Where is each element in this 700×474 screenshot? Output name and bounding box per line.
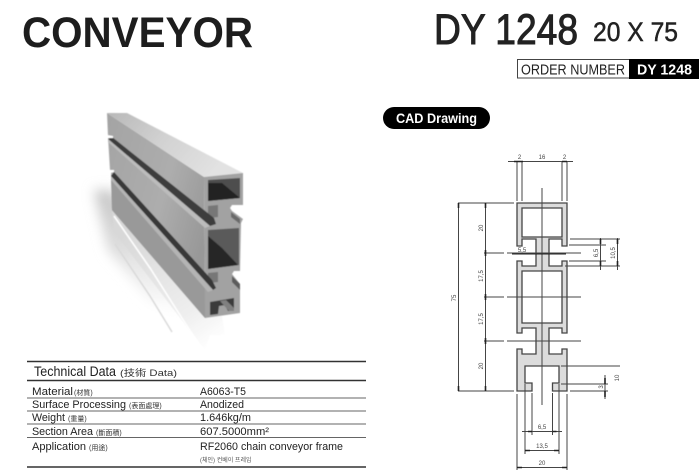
row: section area: (斷面積)	[96, 428, 122, 437]
row: material: (材質)	[74, 388, 93, 397]
model number: DY 1248	[434, 6, 578, 54]
table rules	[27, 362, 366, 467]
dimension labels: 20	[539, 461, 546, 467]
dimension labels: 17,5	[479, 313, 485, 325]
row: material: Material	[32, 386, 73, 398]
table heading: Technical Data	[34, 364, 116, 379]
row: weight: 1.646kg/m	[200, 412, 251, 424]
dimension labels: 2	[563, 155, 567, 161]
lower notch webs	[208, 272, 218, 283]
row: material: A6063-T5	[200, 386, 246, 398]
table heading	[34, 364, 177, 379]
technical data table	[27, 362, 366, 467]
row: weight	[32, 412, 251, 424]
dimension lines	[458, 162, 620, 470]
middle hollow	[208, 228, 239, 269]
top face	[107, 113, 243, 177]
lower band of the side face	[111, 176, 213, 318]
CAD section drawing	[452, 155, 621, 470]
row: application: RF2060 chain conveyor frame	[200, 441, 343, 453]
dimension labels: 17,5	[479, 270, 485, 282]
dimension labels: 10,5	[611, 247, 617, 259]
dimension labels: 6,5	[538, 425, 547, 431]
row: application	[32, 441, 343, 464]
CAD Drawing pill: CAD Drawing	[396, 111, 477, 126]
title: CONVEYOR	[22, 9, 253, 57]
row: application: Application	[32, 441, 86, 453]
row: surface processing: (表面處理)	[129, 401, 162, 410]
order number badge: ORDER NUMBER	[521, 62, 625, 78]
order number badge	[518, 59, 699, 79]
profile cross-section	[517, 203, 567, 391]
side face	[107, 113, 205, 318]
dimension labels: 20	[479, 224, 485, 231]
dimension labels: 10	[615, 374, 621, 381]
table heading: (技術 Data)	[120, 367, 177, 378]
model number: 20 X 75	[593, 17, 678, 47]
lower slot	[111, 172, 216, 290]
row: material	[32, 386, 246, 398]
dimension labels: 13,5	[536, 444, 548, 450]
dimension labels: 75	[452, 294, 458, 301]
upper notch webs	[208, 205, 218, 218]
dimension labels: 5,5	[518, 248, 527, 254]
row: section area	[32, 426, 269, 438]
dimension labels: 16	[539, 155, 546, 161]
aluminium profile render	[94, 113, 243, 350]
row: section area: 607.5000mm²	[200, 426, 269, 438]
dimension labels: 20	[479, 362, 485, 369]
row: weight: Weight	[32, 412, 65, 424]
CAD Drawing pill	[383, 107, 490, 129]
row: surface processing	[32, 399, 244, 411]
upper slot	[108, 137, 216, 226]
row: surface processing: Anodized	[200, 399, 244, 411]
front face	[204, 173, 243, 318]
upper hollow	[208, 178, 240, 201]
dimension arrow ticks	[458, 162, 618, 468]
row: surface processing: Surface Processing	[32, 399, 126, 411]
lower hollow	[210, 298, 234, 315]
dimension labels: 3	[599, 385, 605, 389]
row: section area: Section Area	[32, 426, 94, 438]
dimension labels: 2	[518, 155, 522, 161]
row: application: (체인) 컨베이 프레임	[200, 456, 252, 464]
floor shadow and reflection	[94, 190, 225, 350]
row: application: (用途)	[89, 444, 108, 452]
order number badge: DY 1248	[637, 62, 692, 78]
dimension labels	[452, 155, 621, 467]
row: weight: (重量)	[68, 415, 87, 423]
dimension labels: 6,5	[594, 248, 600, 257]
model number	[434, 6, 678, 54]
